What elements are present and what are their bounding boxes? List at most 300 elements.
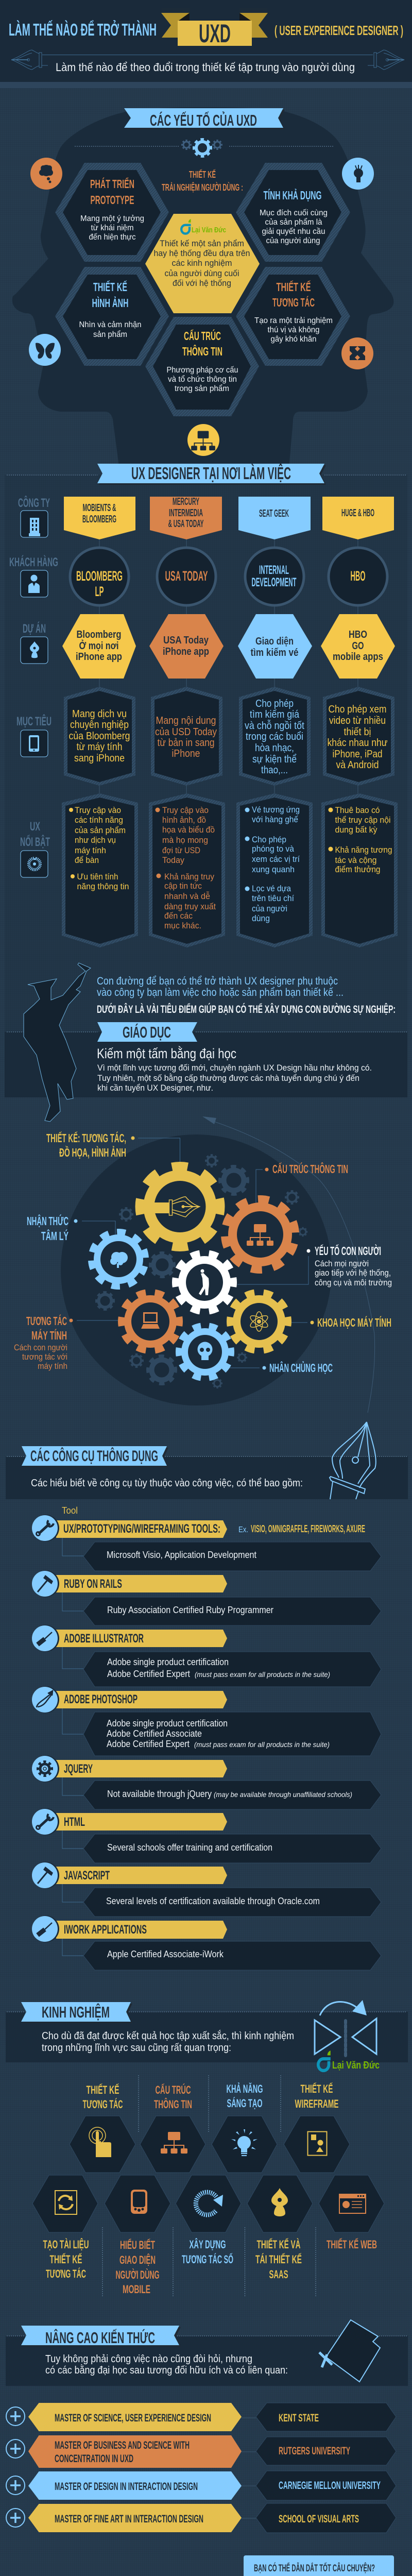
UX feature: USA Today: Today xyxy=(162,855,184,865)
banner: at work: UX DESIGNER TẠI NƠI LÀM VIỆC xyxy=(131,464,291,483)
title: left: LÀM THẾ NÀO ĐỂ TRỞ THÀNH xyxy=(9,20,157,39)
label: human computer interaction: MÁY TÍNH xyxy=(31,1328,67,1342)
row label: company xyxy=(18,496,50,537)
tool: JavaScript: Several levels of certification available through Oracle.com xyxy=(106,1896,320,1906)
hexagon: information architecture: Phương pháp cơ cấu xyxy=(167,366,238,375)
hexagon: information architecture: CẤU TRÚC xyxy=(184,329,221,343)
skill: interaction documentation: THIẾT KẾ xyxy=(49,2253,82,2266)
gear: computer science xyxy=(231,1293,287,1350)
skill: web design xyxy=(319,2175,384,2251)
UX feature: Seat Geek: của người xyxy=(252,904,287,913)
row label: goal xyxy=(16,714,52,757)
row label: company: CÔNG TY xyxy=(18,496,50,510)
banner: experience: KINH NGHIỆM xyxy=(42,2003,110,2021)
tool: Adobe Illustrator: (must pass exam for all products in the suite) xyxy=(195,1670,330,1679)
skill: creativity: KHẢ NĂNG xyxy=(227,2082,263,2095)
goal: Bloomberg: từ máy tính xyxy=(76,741,123,753)
tool: jQuery: JQUERY xyxy=(64,1762,93,1776)
hexagon: UX definition: hay hệ thống đều dựa trên xyxy=(153,248,250,258)
UX feature: USA Today: Khả năng truy xyxy=(164,872,214,882)
tool: UX tools: UX/PROTOTYPING/WIREFRAMING TOOLS: xyxy=(63,1522,220,1536)
degree: School of Visual Arts: MASTER OF FINE ART IN INTERACTION DESIGN xyxy=(55,2513,203,2525)
goal: USA Today: từ bản in sang xyxy=(158,737,214,749)
UX feature: Bloomberg: để bàn xyxy=(75,855,99,865)
subtitle: Làm thế nào để theo đuổi trong thiết kế tập trung vào người dùng xyxy=(56,61,355,74)
UX feature: Seat Geek: với hàng ghế xyxy=(252,815,298,824)
skill: mobile UI: GIAO DIỆN xyxy=(119,2253,156,2266)
label: anthropology: NHÂN CHỦNG HỌC xyxy=(269,1360,333,1375)
goal: HBO: Cho phép xem xyxy=(329,704,386,715)
banner: elements: CÁC YẾU TỐ CỦA UXD xyxy=(150,111,257,129)
UX feature: Bloomberg: máy tính xyxy=(75,845,106,855)
client circle: Bloomberg LP xyxy=(70,548,129,605)
client circle: HBO: HBO xyxy=(350,568,366,584)
hexagon: prototype: từ khái niệm xyxy=(91,224,134,232)
tool: Ruby on Rails: RUBY ON RAILS xyxy=(64,1577,122,1591)
arc arrow xyxy=(202,1116,375,1413)
skill: interaction design xyxy=(70,2083,135,2173)
degrees list xyxy=(6,2403,396,2533)
goal: Seat Geek: trong các buổi xyxy=(246,731,303,742)
hexagon: prototype: Mang một ý tưởng xyxy=(80,214,144,223)
project hexagon: USA Today xyxy=(149,614,224,679)
pennant: Mercury Intermedia xyxy=(150,496,222,539)
client circle: USA Today xyxy=(157,548,216,605)
hexagon: UX definition: Thiết kế một sản phẩm xyxy=(160,239,244,248)
hexagon: interaction design: TƯƠNG TÁC xyxy=(272,295,315,309)
hexagon: UX definition: các kinh nghiệm xyxy=(172,258,232,268)
UX feature: USA Today: mục khác. xyxy=(164,921,201,930)
degree: School of Visual Arts xyxy=(6,2503,396,2533)
icon: large pen nib xyxy=(330,1422,376,1499)
UX feature: USA Today: đến các xyxy=(164,911,193,921)
hexagon: UX definition: của người dùng cuối xyxy=(165,268,239,278)
graduate silhouette xyxy=(24,963,91,1122)
hexagon: usability: của sản phẩm là xyxy=(265,217,322,227)
skill: information architecture: THÔNG TIN xyxy=(154,2098,192,2111)
goal: HBO: thiết bị xyxy=(344,726,371,738)
label: cognitive psychology: TÂM LÝ xyxy=(41,1229,68,1243)
chart: gears of UX skills xyxy=(14,1116,392,1413)
label: human computer interaction: TƯƠNG TÁC xyxy=(26,1314,67,1328)
UX feature: USA Today: mà họ mong xyxy=(162,835,208,845)
hexagon: interaction design xyxy=(236,267,350,366)
tool: jQuery xyxy=(32,1755,381,1809)
banner: tools: CÁC CÔNG CỤ THÔNG DỤNG xyxy=(30,1447,158,1465)
ribbon: UXD: UXD xyxy=(199,19,231,48)
header xyxy=(0,0,412,88)
client circle: internal development: DEVELOPMENT xyxy=(251,575,297,589)
tool: jQuery: (may be available through unaffiliated schools) xyxy=(214,1790,352,1799)
goal: HBO: và Android xyxy=(336,759,379,771)
UX feature: HBO: tác và cộng xyxy=(335,855,377,865)
heading: UX design: TRẢI NGHIỆM NGƯỜI DÙNG : xyxy=(162,182,243,193)
UX feature: Bloomberg: Ưu tiên tính xyxy=(77,872,118,882)
label: design xyxy=(46,1131,135,1159)
skill: wireframe xyxy=(284,2082,350,2173)
goal: USA Today: của USD Today xyxy=(155,726,217,738)
degree: Kent State xyxy=(6,2403,396,2431)
panel: UX designer at work xyxy=(5,464,407,1032)
UX feature: USA Today: họa và biểu đồ xyxy=(162,825,215,835)
goal: HBO: iPhone, iPad xyxy=(333,749,382,760)
goal: Bloomberg: sang iPhone xyxy=(74,753,125,764)
hexagon: information architecture: THÔNG TIN xyxy=(182,344,222,358)
tools intro: Các hiểu biết về công cụ tùy thuộc vào công việc, có thể bao gồm: xyxy=(31,1478,303,1489)
skill: digital interaction: TƯƠNG TÁC SỐ xyxy=(182,2252,233,2266)
label: information architecture: CẤU TRÚC THÔNG TIN xyxy=(272,1162,348,1176)
experience text: trong những lĩnh vực sau cũng rất quan trọng: xyxy=(42,2042,231,2054)
banner: elements xyxy=(124,108,285,129)
project hexagon: HBO GO: mobile apps xyxy=(333,651,383,663)
UX feature: Seat Geek: Lọc vé dựa xyxy=(252,884,291,893)
hexagon: UX definition xyxy=(145,214,260,313)
tool: Adobe Photoshop: Adobe single product certification xyxy=(107,1718,228,1728)
UX feature: Seat Geek: xem các vị trí xyxy=(252,854,300,864)
connectors xyxy=(99,536,358,793)
hexagon: usability: của người dùng xyxy=(266,236,320,245)
UX feature: Seat Geek: dùng xyxy=(252,913,270,923)
icon: butterfly xyxy=(29,334,61,366)
panel: experience xyxy=(6,2000,408,2071)
UX feature: Seat Geek: phóng to và xyxy=(252,844,294,854)
pennant: Mobients and Bloomberg xyxy=(64,497,135,539)
hexagon: information architecture: trong sản phẩm xyxy=(175,384,229,393)
hexagon: UX definition: đối với hệ thống xyxy=(173,278,231,288)
skill: digital interaction xyxy=(176,2175,241,2266)
skill: information architecture: CẤU TRÚC xyxy=(156,2083,191,2096)
pennant: Huge and HBO xyxy=(322,497,394,539)
UX feature: Bloomberg: của sản phẩm xyxy=(75,825,126,835)
advanced text xyxy=(45,2353,288,2376)
gear: cognitive psychology xyxy=(88,1228,149,1290)
pennant: Mercury Intermedia: & USA TODAY xyxy=(168,518,204,530)
tool header: Tool xyxy=(62,1505,78,1516)
tool: HTML: HTML xyxy=(64,1815,85,1829)
gear: human factors xyxy=(176,1254,233,1311)
label: human computer interaction: tương tác với xyxy=(22,1352,67,1362)
skill: wireframe: WIREFRAME xyxy=(295,2097,339,2110)
client circle: internal development xyxy=(245,548,304,605)
hexagon: interaction design: gây khó khăn xyxy=(271,335,316,344)
education text: Tuy nhiên, một số bằng cấp thường được các nhà tuyển dụng chú ý đến xyxy=(97,1073,359,1083)
banner: advanced knowledge: NÂNG CAO KIẾN THỨC xyxy=(45,2328,155,2347)
head silhouette xyxy=(12,107,393,477)
client circle: Bloomberg LP: LP xyxy=(95,584,104,599)
logo: Lai Van Duc: Lại Văn Đức xyxy=(332,2060,380,2071)
hexagon: visual design: THIẾT KẾ xyxy=(93,280,127,294)
project hexagon: ticket search xyxy=(238,614,312,679)
skill: wireframe: THIẾT KẾ xyxy=(301,2082,333,2095)
tool: Adobe Illustrator: ADOBE ILLUSTRATOR xyxy=(64,1632,144,1646)
project hexagon: USA Today: iPhone app xyxy=(163,646,209,657)
UX feature: HBO: điểm thưởng xyxy=(335,865,380,874)
tool: Adobe Photoshop xyxy=(32,1686,381,1756)
row label: UX highlights: UX xyxy=(30,820,40,834)
panel: education xyxy=(5,963,407,1122)
tool: JavaScript: JAVASCRIPT xyxy=(64,1869,110,1883)
degree: Rutgers: MASTER OF BUSINESS AND SCIENCE WITH xyxy=(55,2439,190,2451)
project hexagon: HBO GO: GO xyxy=(352,640,364,652)
skill: digital interaction: XÂY DỰNG xyxy=(190,2238,226,2251)
UX feature: HBO xyxy=(321,793,398,947)
hexagon: prototype xyxy=(55,163,169,262)
banner: advanced knowledge xyxy=(21,2326,181,2347)
skill: mobile UI: NGƯỜI DÙNG xyxy=(115,2268,160,2281)
project hexagon: Bloomberg: iPhone app xyxy=(76,651,122,663)
skill: SaaS design: THIẾT KẾ VÀ xyxy=(256,2238,301,2251)
label: anthropology xyxy=(263,1360,333,1375)
experience grid xyxy=(32,2075,384,2297)
intro text: vào công ty bạn làm việc cho hoặc sản phẩm bạn thiết kế ... xyxy=(97,987,344,998)
client circle: internal development: INTERNAL xyxy=(259,563,289,577)
skill: interaction documentation xyxy=(32,2175,98,2280)
label: human factors xyxy=(307,1244,392,1287)
skill: web design: THIẾT KẾ WEB xyxy=(327,2238,377,2251)
advanced text: Tuy không phải công việc nào cũng đòi hỏi, nhưng xyxy=(45,2353,252,2365)
experience text xyxy=(42,2030,294,2054)
UX feature: Seat Geek: xung quanh xyxy=(252,865,295,874)
tool: Adobe Illustrator: Adobe single product certification xyxy=(107,1657,229,1667)
skill: interaction design: THIẾT KẾ xyxy=(87,2083,119,2096)
goal: USA Today: iPhone xyxy=(172,748,200,759)
logo: Lai Van Duc xyxy=(181,219,226,234)
pen nib rule xyxy=(11,50,404,70)
panel: common tools xyxy=(6,1422,408,1516)
icon: hierarchy xyxy=(187,424,219,456)
goal: HBO: video từ nhiều xyxy=(329,715,386,726)
row label: goal: MỤC TIÊU xyxy=(16,714,52,728)
tool: jQuery: Not available through jQuery xyxy=(107,1789,212,1799)
icon: flip arrow xyxy=(315,2000,376,2056)
UX feature: Seat Geek: Cho phép xyxy=(252,835,286,844)
gear: human computer interaction xyxy=(122,1293,179,1350)
goal: USA Today xyxy=(151,687,222,786)
skill: information architecture xyxy=(140,2083,205,2173)
goal: Bloomberg xyxy=(64,687,135,786)
gear: design xyxy=(141,1167,219,1246)
UX feature: USA Today: hình ảnh, đồ xyxy=(162,815,206,825)
tool: Adobe Photoshop: Adobe Certified Associate xyxy=(107,1728,202,1739)
label: cognitive psychology: NHẬN THỨC xyxy=(27,1214,68,1228)
gear: anthropology xyxy=(179,1326,231,1378)
project hexagon: ticket search: Giao diện xyxy=(255,636,294,647)
project hexagon: USA Today: USA Today xyxy=(163,635,209,646)
speech bubble xyxy=(244,2555,394,2576)
row label: UX highlights: NỔI BẬT xyxy=(20,835,50,849)
UX feature: Seat Geek: trên tiêu chí xyxy=(252,893,294,903)
panel: elements of UXD xyxy=(12,107,393,477)
pennant: Mercury Intermedia: MERCURY xyxy=(173,496,199,507)
skill: SaaS design: TÁI THIẾT KẾ xyxy=(255,2253,302,2266)
heading: UX design: THIẾT KẾ xyxy=(189,169,216,180)
heading: UX design xyxy=(162,169,243,193)
skill: SaaS design xyxy=(247,2175,313,2281)
goal: Seat Geek xyxy=(239,687,311,786)
education text: Vì một lĩnh vực tương đối mới, chuyên ngành UX Design hầu như không có. xyxy=(97,1063,372,1073)
intro text: Con đường để bạn có thể trở thành UX designer phụ thuộc xyxy=(97,975,338,987)
row label: project xyxy=(21,621,48,664)
logo: Lai Van Duc: Lại Văn Đức xyxy=(192,226,226,234)
banner: tools xyxy=(22,1446,168,1467)
tool: JavaScript xyxy=(32,1862,381,1917)
hexagon: usability xyxy=(236,163,350,262)
pennant: Mercury Intermedia: INTERMEDIA xyxy=(169,507,203,519)
goal: Seat Geek: thao,... xyxy=(261,765,288,776)
project hexagon: HBO GO xyxy=(321,614,395,679)
goal: Seat Geek: Cho phép xyxy=(255,698,294,709)
project hexagon: HBO GO: HBO xyxy=(349,629,367,640)
tool: Adobe Photoshop: ADOBE PHOTOSHOP xyxy=(64,1692,138,1706)
banner: education: GIÁO DỤC xyxy=(123,1023,171,1041)
client circle: HBO xyxy=(329,548,387,605)
gears divider xyxy=(75,140,334,156)
banner: education xyxy=(97,1022,197,1042)
hexagon: usability: giải quyết nhu cầu xyxy=(262,227,325,236)
tool: Adobe Illustrator: Adobe Certified Expert xyxy=(107,1669,190,1679)
tool: iWork applications: IWORK APPLICATIONS xyxy=(64,1923,147,1937)
skill: interaction documentation: TƯƠNG TÁC xyxy=(46,2267,86,2280)
goal: Seat Geek: và chỗ ngồi tốt xyxy=(245,720,304,732)
panel: advanced knowledge xyxy=(6,2320,408,2386)
small gears xyxy=(97,1155,307,1388)
advanced text: có các bằng đại học sau tương đối hữu ích và có liên quan: xyxy=(45,2364,288,2376)
label: information architecture xyxy=(265,1162,348,1176)
pennant: Seat Geek: SEAT GEEK xyxy=(259,508,289,519)
hexagon: prototype: đến hiện thực xyxy=(89,233,136,242)
hexagon: visual design: sản phẩm xyxy=(93,330,127,339)
hexagon: usability: Mục đích cuối cùng xyxy=(260,209,328,217)
backdrop circle xyxy=(61,1134,332,1405)
icon: thought cloud xyxy=(30,158,62,190)
UX feature: USA Today: Truy cập vào xyxy=(162,805,209,815)
UX feature: Bloomberg: như dịch vụ xyxy=(75,835,116,845)
UX feature: Bloomberg: các tính năng xyxy=(75,815,123,825)
banner: at work xyxy=(97,464,326,485)
UX feature: Bloomberg xyxy=(62,793,138,947)
tool: iWork applications xyxy=(32,1916,381,1970)
goal: Seat Geek: tìm kiếm giá xyxy=(250,709,300,720)
row label: client xyxy=(9,555,58,597)
tool: Adobe Photoshop: Adobe Certified Expert xyxy=(107,1739,190,1749)
tool: UX tools: Microsoft Visio, Application Development xyxy=(107,1550,256,1560)
hexagon: information architecture xyxy=(145,317,259,416)
UX feature: HBO: Khả năng tương xyxy=(335,845,392,855)
label: human computer interaction: Cách con người xyxy=(14,1343,67,1352)
degree: Carnegie Mellon xyxy=(6,2471,396,2500)
icon: light bulb xyxy=(342,158,374,190)
skill: mobile UI xyxy=(105,2175,170,2296)
skill: creativity xyxy=(212,2082,277,2173)
hexagon: interaction design: Tạo ra một trải nghiệm xyxy=(254,316,333,325)
UX feature: HBO: dung bất kỳ xyxy=(335,825,377,835)
goal: Bloomberg: Mang dịch vụ xyxy=(72,708,127,720)
UX feature: Bloomberg: Truy cập vào xyxy=(75,805,121,815)
label: human factors: giao tiếp với hệ thống, xyxy=(315,1268,391,1278)
client circle: Bloomberg LP: BLOOMBERG xyxy=(76,568,123,584)
row label: project: DỰ ÁN xyxy=(23,621,46,636)
goal: Seat Geek: sự kiện thể xyxy=(252,754,297,765)
hexagon: visual design xyxy=(55,267,169,366)
label: cognitive psychology xyxy=(27,1214,77,1243)
goal: HBO: khác nhau như xyxy=(328,737,387,749)
hexagon: visual design: HÌNH ẢNH xyxy=(92,295,129,310)
degree: Rutgers xyxy=(6,2435,396,2468)
UX feature: HBO: Thuê bao có xyxy=(335,805,380,815)
soft skills xyxy=(19,2555,394,2576)
tool: Ruby on Rails: Ruby Association Certified Ruby Programmer xyxy=(107,1605,273,1615)
goal: HBO xyxy=(323,687,394,786)
intro text xyxy=(97,975,396,1015)
hexagon: interaction design: THIẾT KẾ xyxy=(276,280,311,294)
row label: client: KHÁCH HÀNG xyxy=(9,555,58,569)
skill: mobile UI: MOBILE xyxy=(123,2283,150,2296)
leader lines xyxy=(77,1138,308,1368)
degree: Rutgers: CONCENTRATION IN UXD xyxy=(55,2453,133,2465)
label: design: ĐỒ HỌA, HÌNH ẢNH xyxy=(59,1145,126,1159)
client circle: USA Today: USA TODAY xyxy=(165,568,208,584)
hexagon: visual design: Nhìn và cảm nhận xyxy=(79,320,141,329)
hexagon: prototype: PHÁT TRIỂN xyxy=(90,177,134,191)
project hexagon: Bloomberg: Bloomberg xyxy=(76,629,122,640)
hexagon: usability: TÍNH KHẢ DỤNG xyxy=(264,188,321,202)
UX feature: USA Today: nhanh và dễ xyxy=(164,891,210,901)
goal: Bloomberg: chuyên nghiệp xyxy=(70,719,129,731)
UX feature: Bloomberg: năng thông tin xyxy=(77,882,129,891)
degree: Carnegie Mellon: MASTER OF DESIGN IN INTERACTION DESIGN xyxy=(55,2481,198,2493)
skill: interaction design: TƯƠNG TÁC xyxy=(82,2098,123,2111)
education text: Kiếm một tấm bằng đại học xyxy=(97,1045,236,1061)
label: design: THIẾT KẾ: TƯƠNG TÁC, xyxy=(46,1131,126,1145)
tool: Adobe Photoshop: (must pass exam for all products in the suite) xyxy=(194,1740,330,1749)
goal: Bloomberg: của Bloomberg xyxy=(69,731,130,742)
row label: UX highlights xyxy=(20,820,50,877)
project hexagon: Bloomberg: Ở mọi nơi xyxy=(79,639,118,652)
tool: Adobe Illustrator xyxy=(32,1625,381,1687)
degree: Kent State: MASTER OF SCIENCE, USER EXPERIENCE DESIGN xyxy=(55,2412,211,2424)
banner: experience xyxy=(21,2002,132,2023)
skill: interaction documentation: TẠO TÀI LIỆU xyxy=(43,2238,89,2251)
UX feature: Seat Geek xyxy=(236,793,313,947)
skill: mobile UI: HIỂU BIẾT xyxy=(120,2239,155,2251)
UX feature: USA Today: cập tin tức xyxy=(164,881,202,891)
UX feature: USA Today: dàng truy xuất xyxy=(164,902,216,911)
goal: USA Today: Mang nội dung xyxy=(156,715,216,726)
skill: SaaS design: SAAS xyxy=(269,2268,288,2281)
hexagon: interaction design: thú vị và không xyxy=(268,326,319,334)
icon: paper and pencil xyxy=(319,2320,380,2382)
tool: HTML: Several schools offer training and certification xyxy=(107,1842,272,1853)
gear: information architecture xyxy=(220,1194,300,1275)
icon: puzzle xyxy=(341,337,373,369)
pennant: Seat Geek xyxy=(238,497,311,539)
pennant: Mobients and Bloomberg: BLOOMBERG xyxy=(82,514,116,525)
hexagon: prototype: PROTOTYPE xyxy=(91,193,134,207)
label: human computer interaction xyxy=(14,1314,73,1371)
ribbon: UXD xyxy=(161,8,268,48)
pennant: Mobients and Bloomberg: MOBIENTS & xyxy=(82,502,116,514)
tool: Ruby on Rails xyxy=(32,1570,381,1625)
education text: khi cần tuyển UX Designer, như. xyxy=(97,1083,213,1093)
label: human computer interaction: máy tính xyxy=(38,1361,67,1371)
education text xyxy=(97,1045,372,1093)
pennant: Huge and HBO: HUGE & HBO xyxy=(341,507,374,519)
UX feature: USA Today xyxy=(149,793,225,947)
project hexagon: ticket search: tìm kiếm vé xyxy=(250,647,299,658)
label: human factors: Cách mọi người xyxy=(315,1259,369,1268)
UX feature: HBO: thể truy cập nội xyxy=(335,815,390,825)
tool: UX tools xyxy=(32,1515,381,1571)
